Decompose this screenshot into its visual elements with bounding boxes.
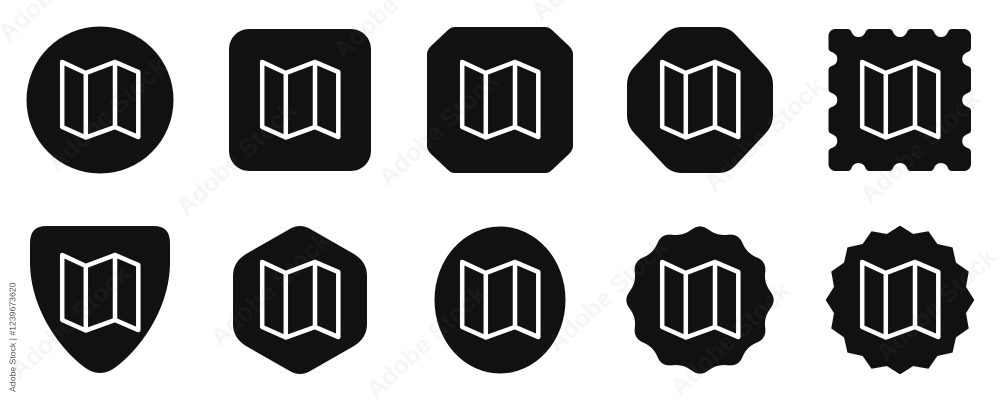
- icon: map in chamfered square badge: [427, 27, 573, 173]
- watermark: repeated stock text: Adobe Stock: [171, 97, 302, 221]
- watermark: repeated stock text: Adobe Stock: [205, 227, 336, 351]
- watermark: repeated stock text: Adobe Stock: [855, 85, 986, 209]
- watermark: repeated stock text: Adobe Stock: [871, 243, 1000, 367]
- icon: map in rounded square badge: [229, 29, 371, 171]
- icon: map in scalloped badge: [626, 226, 774, 374]
- watermark: repeated stock text: Adobe Stock: [5, 260, 136, 384]
- watermark: repeated stock text: Adobe Stock: [699, 73, 830, 197]
- watermark: repeated stock text: Adobe Stock: [373, 67, 504, 191]
- icon: map in hexagon badge: [233, 226, 367, 374]
- icon: map in postage stamp badge: [827, 28, 973, 172]
- watermark: repeated stock text: Adobe Stock: [542, 233, 673, 357]
- credit text: stock id: Adobe Stock | #1239673620: [8, 282, 18, 392]
- watermark: repeated stock text: Adobe Stock: [665, 277, 796, 400]
- icon: map in starburst badge: [826, 226, 974, 374]
- icon: map in circle badge: [26, 26, 174, 174]
- watermark: repeated stock text: Adobe Stock: [42, 53, 173, 177]
- icon: map in shield badge: [30, 226, 170, 373]
- icon: map in oval badge: [434, 226, 566, 374]
- icon: map in octagon badge: [627, 27, 773, 173]
